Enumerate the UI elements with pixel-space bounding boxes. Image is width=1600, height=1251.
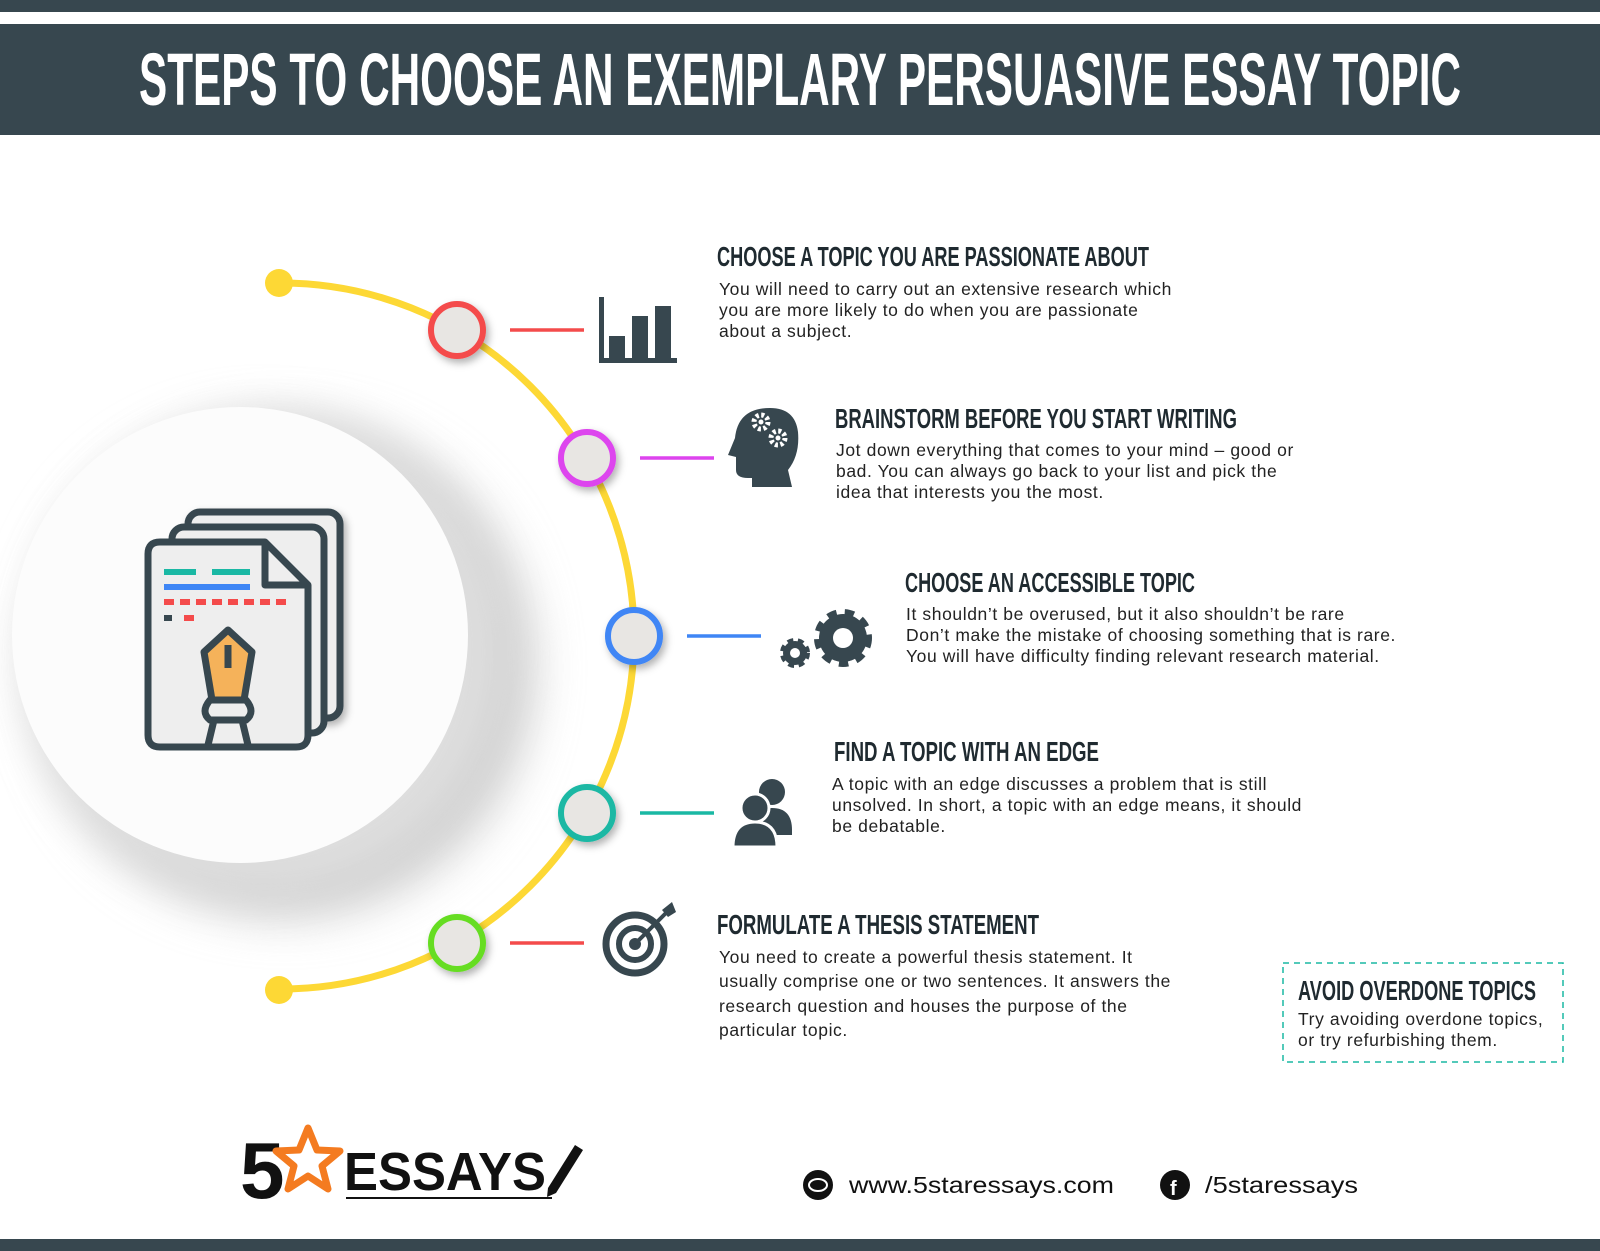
- step 1 text: [717, 241, 1172, 341]
- step 3 text: You will have difficulty finding relevant research material.: [906, 646, 1380, 666]
- logo: ESSAYS: [344, 1142, 546, 1202]
- step 4 text: A topic with an edge discusses a problem that is still: [832, 774, 1267, 794]
- step 4 text: FIND A TOPIC WITH AN EDGE: [834, 736, 1099, 767]
- step 2 text: Jot down everything that comes to your mind – good or: [836, 440, 1294, 460]
- icon: head with gears: [728, 408, 798, 487]
- step 2 text: idea that interests you the most.: [836, 482, 1104, 502]
- step 1 text: about a subject.: [719, 321, 852, 341]
- big circle with shadow: [12, 407, 535, 918]
- node 3: [608, 610, 660, 662]
- logo: [240, 1126, 583, 1215]
- step 1 text: you are more likely to do when you are passionate: [719, 300, 1138, 320]
- header banner: [0, 24, 1600, 135]
- icon: target: [606, 902, 676, 973]
- step 3 text: CHOOSE AN ACCESSIBLE TOPIC: [905, 567, 1195, 598]
- step 5 text: FORMULATE A THESIS STATEMENT: [717, 909, 1039, 940]
- node 1: [431, 304, 483, 356]
- step 5 text: You need to create a powerful thesis statement. It: [719, 947, 1133, 967]
- step 1 text: You will need to carry out an extensive research which: [719, 279, 1172, 299]
- icon: people: [733, 779, 792, 847]
- step 3 text: [905, 567, 1396, 666]
- step 4 text: be debatable.: [832, 816, 946, 836]
- step 5 text: research question and houses the purpose of the: [719, 996, 1128, 1016]
- step 5 text: usually comprise one or two sentences. It answers the: [719, 971, 1171, 991]
- step 2 text: [835, 403, 1294, 502]
- icon: gears: [783, 614, 867, 665]
- step 4 text: unsolved. In short, a topic with an edge means, it should: [832, 795, 1302, 815]
- step 4 text: [832, 736, 1302, 836]
- connector lines: [510, 330, 761, 943]
- callout: avoid overdone topics: or try refurbishing them.: [1298, 1030, 1498, 1050]
- step 1 text: CHOOSE A TOPIC YOU ARE PASSIONATE ABOUT: [717, 241, 1149, 272]
- step 2 text: bad. You can always go back to your list and pick the: [836, 461, 1277, 481]
- logo: 5: [240, 1126, 284, 1215]
- facebook: /5staressays: [1205, 1172, 1358, 1198]
- facebook: [1160, 1170, 1358, 1200]
- node 4: [561, 787, 613, 839]
- bottom strip: [0, 1239, 1600, 1251]
- callout: avoid overdone topics: [1283, 963, 1563, 1062]
- top strip: [0, 0, 1600, 12]
- callout: avoid overdone topics: Try avoiding overdone topics,: [1298, 1009, 1543, 1029]
- step 3 text: Don’t make the mistake of choosing something that is rare.: [906, 625, 1396, 645]
- icon: documents with pen nib: [148, 512, 340, 747]
- step 5 text: [717, 909, 1171, 1040]
- website: [803, 1170, 1114, 1200]
- icon: bar chart: [599, 297, 677, 363]
- node 5: [431, 917, 483, 969]
- yellow arc: [265, 269, 634, 1004]
- facebook: f: [1170, 1178, 1177, 1200]
- step 2 text: BRAINSTORM BEFORE YOU START WRITING: [835, 403, 1237, 434]
- step 3 text: It shouldn’t be overused, but it also shouldn’t be rare: [906, 604, 1345, 624]
- step 5 text: particular topic.: [719, 1020, 848, 1040]
- node 2: [561, 432, 613, 484]
- website: www.5staressays.com: [848, 1172, 1114, 1198]
